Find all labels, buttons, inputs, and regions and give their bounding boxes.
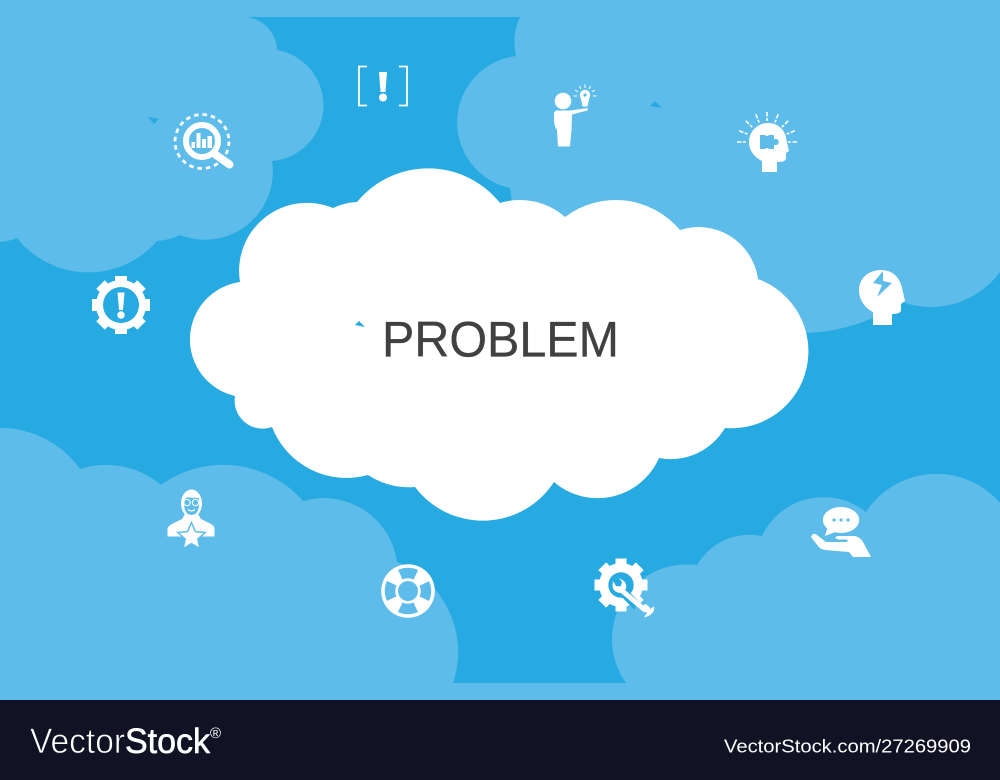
logo: Vector: Vector [30, 722, 125, 761]
cloud: top left [0, 0, 323, 272]
top strip [0, 0, 1000, 17]
icon: person holding light bulb [554, 84, 596, 146]
icon: gear with wrench [594, 558, 654, 618]
marker: center triangle [355, 321, 365, 327]
icon: head with lightning bolt [859, 270, 905, 325]
logo: registered mark: ® [210, 725, 221, 742]
icon: man with star [168, 490, 214, 547]
bottom strip [0, 683, 1000, 700]
title: PROBLEM [382, 312, 619, 368]
marker: top right triangle [650, 101, 662, 108]
icon: lifebuoy [381, 564, 435, 618]
footer bar [0, 700, 1000, 780]
cloud: central white [190, 168, 808, 521]
footer image id: VectorStock.com/27269909 [724, 736, 971, 756]
logo: Stock: Stock [125, 722, 210, 761]
cloud: top right [457, 0, 1000, 335]
icon: magnifier with bar chart [175, 114, 230, 168]
icon: hand with speech bubble [811, 507, 871, 557]
icon: gear with exclamation [92, 276, 150, 334]
icon: bracketed exclamation [359, 66, 407, 106]
cloud: bottom right [612, 474, 1000, 700]
icon: head with puzzle piece [737, 112, 797, 172]
footer logo [30, 722, 221, 761]
marker: top left triangle [148, 117, 159, 124]
cloud: bottom left [0, 428, 458, 700]
